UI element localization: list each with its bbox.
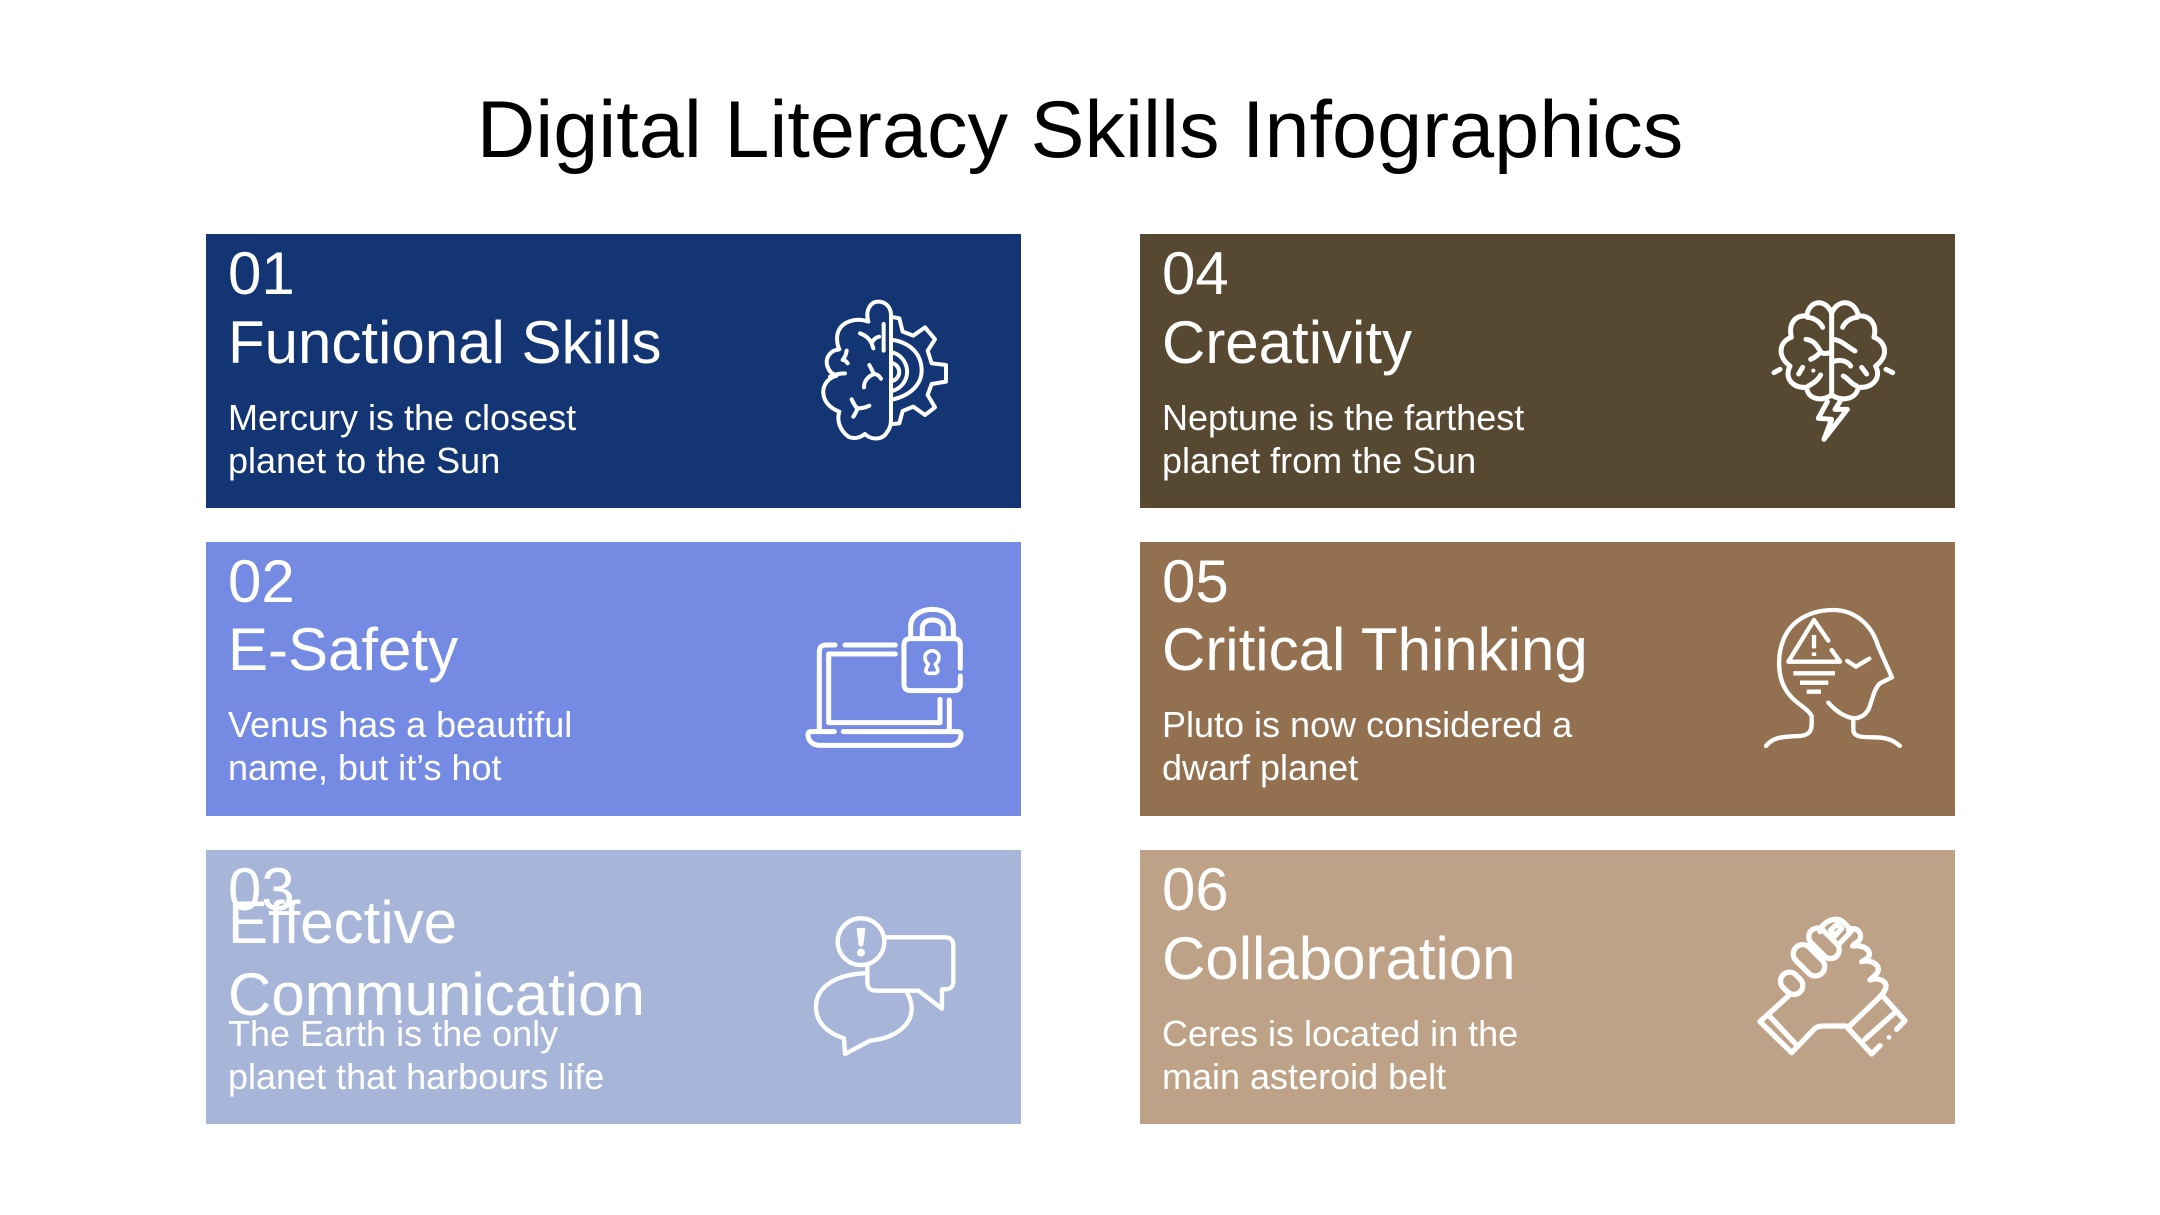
icon: brain with lightning bolt [1774, 303, 1893, 439]
body text 02: Venus has a beautiful [228, 704, 572, 745]
body text 04: planet from the Sun [1162, 440, 1476, 481]
panel: 02 E-Safety [206, 542, 1021, 816]
heading: E-Safety: E-Safety [228, 616, 458, 683]
heading: Functional Skills: Functional Skills [228, 309, 662, 376]
body text 02: name, but it’s hot [228, 747, 502, 788]
number 04: 04 [1162, 240, 1229, 307]
body text 03: The Earth is the only [228, 1013, 558, 1054]
heading: Effective Communication: Communication [228, 961, 645, 1028]
icon: head with warning triangle [1766, 610, 1900, 746]
icon: laptop with padlock [808, 609, 961, 745]
body text 03: planet that harbours life [228, 1056, 604, 1097]
number 06: 06 [1162, 856, 1229, 923]
body text 06: Ceres is located in the [1162, 1013, 1518, 1054]
panel: 01 Functional Skills [206, 234, 1021, 508]
number 03: 03 [228, 856, 295, 923]
icon: clasped hands [1760, 919, 1905, 1054]
number 02: 02 [228, 548, 295, 615]
number 01: 01 [228, 240, 295, 307]
icon: brain and gear [823, 302, 946, 438]
panel: 06 Collaboration [1140, 850, 1955, 1124]
body text 01: Mercury is the closest [228, 397, 576, 438]
body text 05: Pluto is now considered a [1162, 704, 1573, 745]
heading: Critical Thinking: Critical Thinking [1162, 616, 1588, 683]
heading: Creativity: Creativity [1162, 309, 1412, 376]
panel: 03 Effective Communication [206, 850, 1021, 1124]
heading: Collaboration: Collaboration [1162, 925, 1516, 992]
number 05: 05 [1162, 548, 1229, 615]
title: Digital Literacy Skills Infographics [477, 85, 1683, 175]
body text 01: planet to the Sun [228, 440, 500, 481]
body text 06: main asteroid belt [1162, 1056, 1446, 1097]
heading: Effective Communication: Effective [228, 889, 457, 956]
panel: 05 Critical Thinking [1140, 542, 1955, 816]
panel: 04 Creativity [1140, 234, 1955, 508]
icon: speech bubbles with alert [816, 918, 953, 1054]
body text 05: dwarf planet [1162, 747, 1358, 788]
body text 04: Neptune is the farthest [1162, 397, 1524, 438]
